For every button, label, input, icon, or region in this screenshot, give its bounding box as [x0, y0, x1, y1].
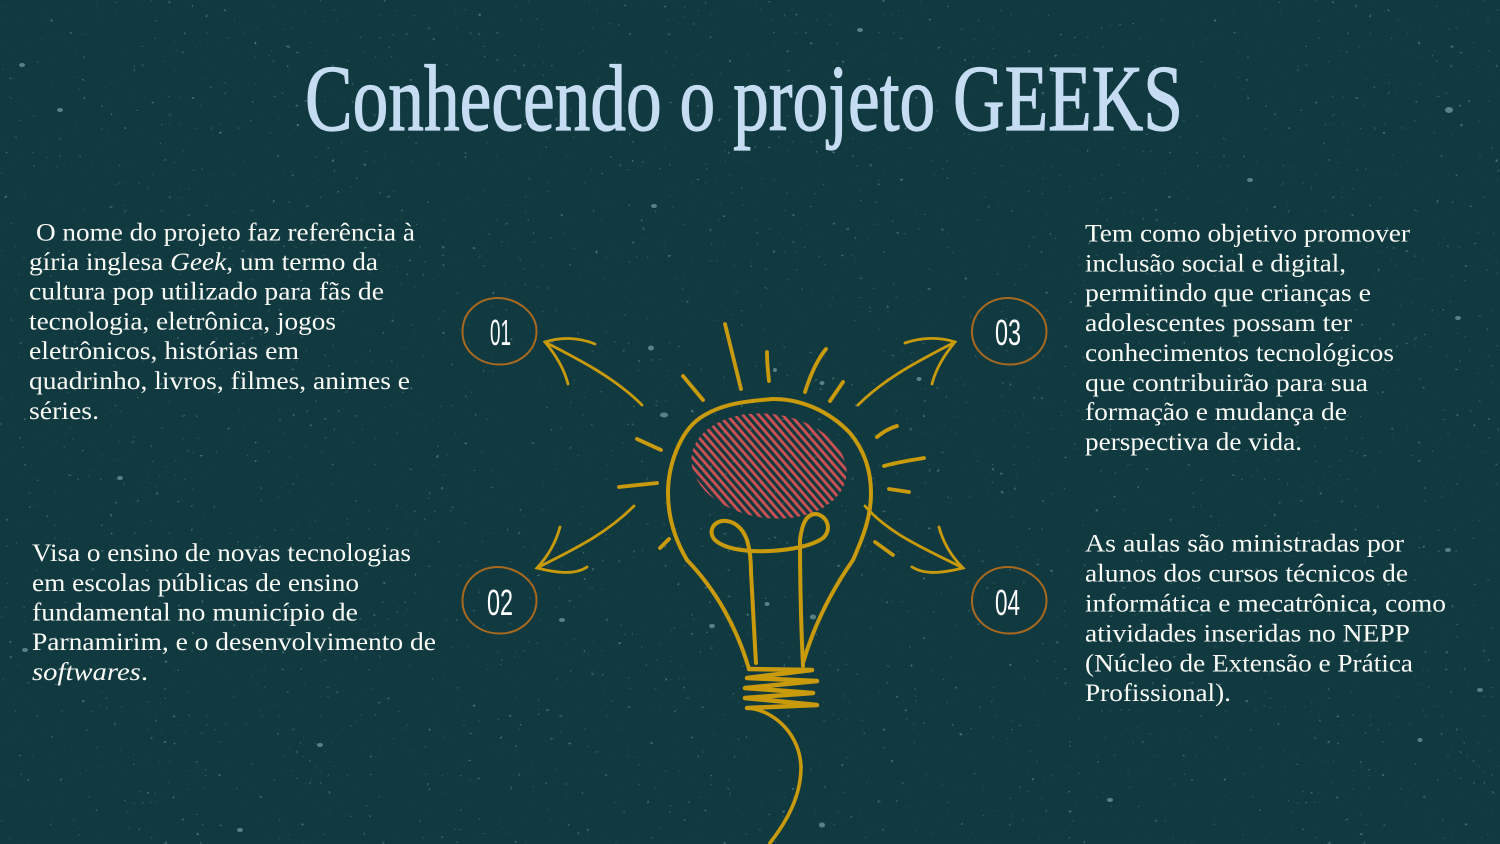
bulb outline: [668, 399, 871, 669]
text block: classes: alunos dos cursos técnicos de: [1085, 560, 1408, 588]
text block: teaching goals: softwares .: [32, 659, 148, 686]
text block: project name: séries.: [29, 398, 99, 425]
text block: project name: [29, 220, 415, 425]
text block: objective: [1085, 220, 1411, 456]
cord: [747, 708, 801, 843]
rays: [619, 324, 924, 555]
text block: teaching goals: Visa o ensino de novas tecnologias: [32, 540, 411, 567]
arrow to 03: [858, 338, 955, 405]
text block: project name: quadrinho, livros, filmes, animes e: [29, 368, 410, 395]
text block: objective: formação e mudança de: [1085, 399, 1347, 426]
text block: teaching goals: [32, 540, 436, 686]
badge 02: 02: [487, 582, 513, 623]
text block: classes: Profissional).: [1085, 680, 1231, 707]
badge 04: 04: [995, 582, 1020, 623]
text block: teaching goals: em escolas públicas de ensino: [32, 570, 359, 597]
filament: [712, 514, 828, 666]
badge 04: [972, 567, 1047, 634]
arrow to 02: [537, 506, 634, 572]
text block: project name: gíria inglesa Geek, um termo da: [29, 249, 378, 276]
text block: objective: Tem como objetivo promover: [1085, 220, 1411, 248]
badge 03: 03: [995, 312, 1021, 353]
screw coil: [745, 669, 817, 708]
text block: project name: O nome do projeto faz referência à: [36, 220, 415, 246]
badge 01: [462, 298, 537, 365]
title: Conhecendo o projeto GEEKS: [305, 47, 1183, 151]
text block: objective: permitindo que crianças e: [1085, 280, 1371, 307]
text block: project name: eletrônicos, histórias em: [29, 338, 300, 365]
icon: light bulb: [619, 324, 924, 843]
text block: objective: conhecimentos tecnológicos: [1085, 340, 1394, 367]
badge 02: [462, 567, 537, 634]
text block: objective: que contribuirão para sua: [1085, 370, 1368, 397]
text block: classes: [1085, 530, 1446, 707]
text block: classes: atividades inseridas no NEPP: [1085, 620, 1410, 648]
text block: objective: perspectiva de vida.: [1085, 429, 1302, 456]
text block: project name: cultura pop utilizado para fãs de: [29, 278, 384, 306]
text block: classes: informática e mecatrônica, como: [1085, 590, 1446, 618]
red scribble: [685, 404, 853, 528]
badge 01: 01: [490, 312, 511, 353]
text block: teaching goals: Parnamirim, e o desenvolvimento de: [32, 629, 436, 656]
arrow to 04: [865, 506, 963, 572]
text block: classes: As aulas são ministradas por: [1085, 530, 1405, 558]
text block: project name: tecnologia, eletrônica, jogos: [29, 308, 336, 336]
text block: classes: (Núcleo de Extensão e Prática: [1085, 650, 1413, 678]
arrow to 01: [545, 338, 642, 405]
text block: objective: adolescentes possam ter: [1085, 310, 1353, 337]
text block: teaching goals: fundamental no município de: [32, 600, 358, 626]
text block: objective: inclusão social e digital,: [1085, 250, 1346, 278]
badge 03: [972, 298, 1047, 365]
